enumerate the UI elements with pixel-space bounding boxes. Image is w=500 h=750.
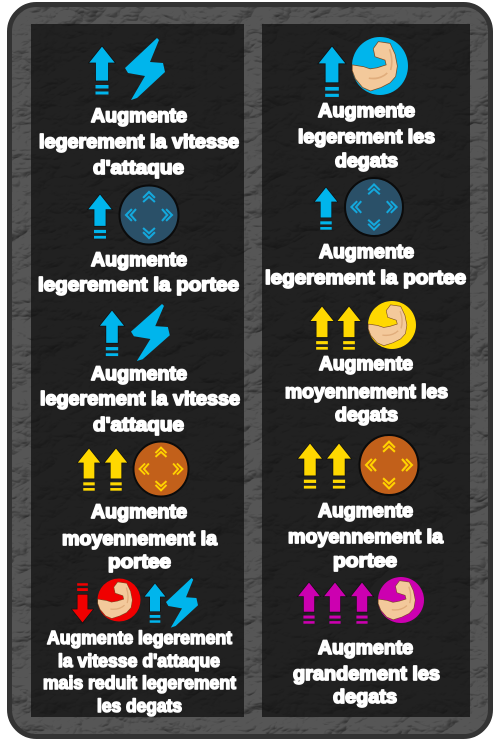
icon: blue range circle: [120, 186, 178, 244]
text: range medium left: moyennement la: [62, 528, 217, 550]
text: range medium right: portee: [333, 550, 397, 572]
icon: blue arrow: [88, 46, 116, 94]
text: attack speed slight 1: legerement la vitesse: [39, 131, 239, 153]
text: range medium left: Augmente: [91, 501, 187, 523]
text: attack speed slight 2: legerement la vitesse: [40, 388, 240, 410]
text: range medium left: [62, 501, 217, 573]
text: range medium right: moyennement la: [288, 526, 443, 548]
icon: blue arrow: [99, 310, 125, 356]
text: speed up damage down: Augmente legerement: [47, 628, 232, 648]
item: attack speed slight 2: [40, 304, 240, 436]
text: range slight left: legerement la portee: [38, 274, 239, 296]
text: range medium right: [288, 500, 443, 572]
icon: yellow arrows: [77, 448, 128, 491]
text: damage medium: moyennement les: [285, 381, 448, 403]
text: range medium right: Augmente: [318, 500, 413, 522]
text: damage large: Augmente: [318, 637, 413, 659]
item: range medium left: [62, 442, 217, 573]
text: damage medium: Augmente: [319, 353, 413, 375]
text: speed up damage down: mais reduit legerement: [43, 673, 236, 693]
text: range slight left: Augmente: [91, 249, 187, 271]
icon: blue arrow: [318, 46, 346, 97]
text: damage slight: legerement les: [298, 126, 435, 148]
text: speed up damage down: les degats: [97, 696, 182, 716]
text: damage medium: [285, 353, 448, 426]
icon: red down arrow: [71, 583, 94, 623]
panel: left column: [31, 24, 244, 717]
text: range slight right: Augmente: [319, 241, 414, 263]
text: attack speed slight 1: d'attaque: [93, 157, 184, 179]
text: damage slight: Augmente: [318, 100, 415, 122]
item: damage medium: [285, 301, 448, 426]
icon: yellow arrows: [310, 306, 361, 350]
icon: blue arrow: [314, 187, 338, 230]
text: damage slight: [298, 100, 435, 172]
icon: red muscle: [98, 578, 140, 622]
text: damage medium: degats: [335, 404, 398, 426]
text: damage large: [293, 637, 440, 708]
icon: blue arrow: [88, 194, 112, 239]
icon: orange range circle: [134, 442, 188, 496]
icon: magenta arrows: [297, 582, 374, 624]
text: speed up damage down: [43, 628, 236, 716]
text: speed up damage down: la vitesse d'attaque: [58, 651, 220, 671]
icon: lightning bolt: [125, 38, 165, 100]
item: range slight right: [265, 178, 466, 289]
text: damage large: grandement les: [293, 663, 440, 685]
icon: magenta muscle: [378, 577, 424, 623]
icon: blue range circle: [345, 178, 403, 236]
text: attack speed slight 2: Augmente: [91, 363, 187, 385]
item: damage large: [293, 577, 440, 708]
item: attack speed slight 1: [39, 38, 239, 179]
icon: lightning bolt: [131, 304, 170, 361]
item: range medium right: [288, 435, 443, 572]
item: damage slight: [298, 37, 435, 172]
item: range slight left: [38, 186, 239, 296]
icon: yellow muscle: [368, 301, 416, 349]
text: damage slight: degats: [335, 150, 398, 172]
text: range medium left: portee: [108, 551, 171, 573]
text: damage large: degats: [333, 686, 397, 708]
icon: lightning bolt: [166, 578, 198, 628]
text: attack speed slight 1: Augmente: [91, 105, 187, 127]
text: range slight right: legerement la portee: [265, 267, 466, 289]
icon: blue muscle: [352, 37, 408, 95]
text: range slight left: [38, 249, 239, 296]
panel: right column: [262, 24, 470, 717]
icon: yellow arrows: [297, 443, 352, 489]
text: range slight right: [265, 241, 466, 289]
icon: blue arrow: [144, 583, 166, 623]
icon: orange range circle: [360, 435, 418, 495]
text: attack speed slight 2: d'attaque: [93, 414, 184, 436]
text: attack speed slight 1: [39, 105, 239, 179]
text: attack speed slight 2: [40, 363, 240, 436]
item: speed up damage down: [43, 578, 236, 716]
